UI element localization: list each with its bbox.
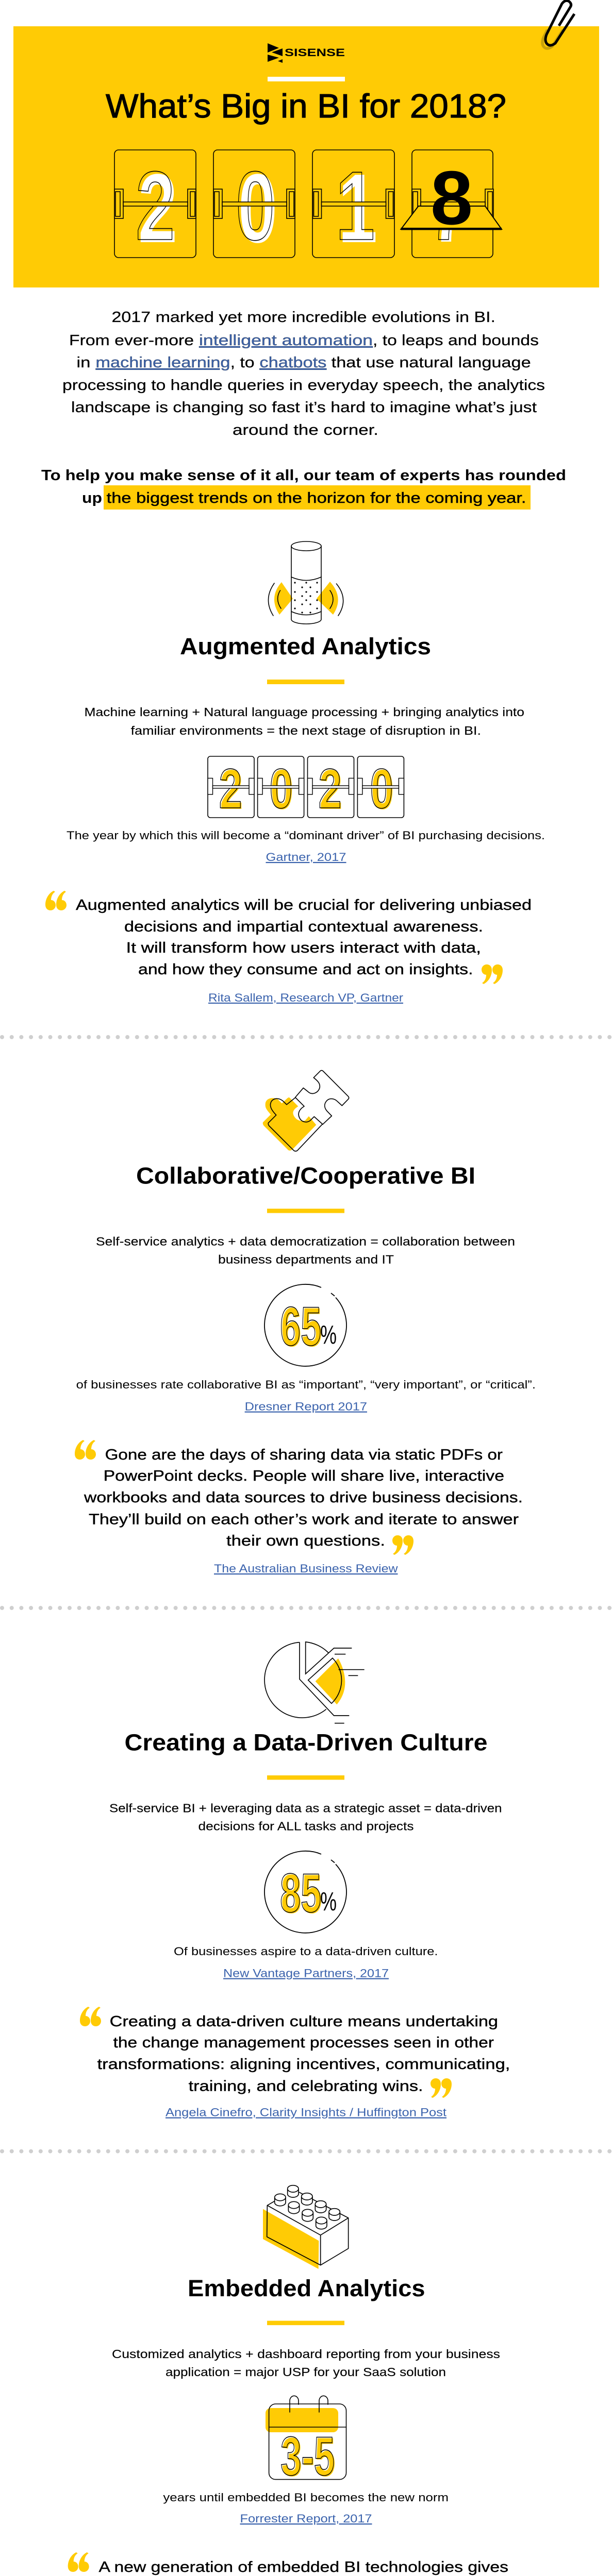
text block: introduction: , to (230, 354, 255, 371)
quote: It will transform how users interact with data, (126, 940, 481, 956)
flip counter 2020: 2 (220, 758, 243, 821)
quote: Augmented analytics will be crucial for delivering unbiased (76, 897, 532, 913)
section: Augmented Analytics (45, 541, 545, 1004)
flip card: 1 (312, 150, 394, 263)
flip counter 2020: 2 (219, 757, 242, 820)
stat: 65%: 65 (281, 1296, 322, 1358)
text: equation (112, 2347, 500, 2379)
text: equation: Self-service BI + leveraging data as a strategic asset = data-driven (109, 1802, 502, 1815)
icon: puzzle pieces (263, 1071, 349, 1151)
quote (45, 891, 532, 984)
flip card: 2: 2 (136, 151, 175, 261)
stat: 65% (264, 1284, 346, 1366)
quote: transformations: aligning incentives, communicating, (97, 2056, 510, 2073)
quote: PowerPoint decks. People will share live, interactive (104, 1468, 504, 1484)
stat: calendar 3-5: 3-5 (280, 2425, 335, 2487)
text: equation (109, 1802, 502, 1833)
quote: and how they consume and act on insights. (138, 961, 473, 978)
stat: 65%: 65 (280, 1295, 321, 1357)
flip counter 2020: 2 (319, 757, 341, 820)
heading: Augmented Analytics (180, 633, 431, 659)
text: equation: decisions for ALL tasks and projects (198, 1820, 413, 1833)
icon: smart speaker (268, 541, 343, 624)
text: equation: familiar environments = the next stage of disruption in BI. (131, 724, 481, 737)
stat: calendar 3-5 (266, 2396, 346, 2488)
text block: introduction: that use natural language (332, 354, 531, 371)
text: stat description: Of businesses aspire to a data-driven culture. (174, 1945, 438, 1958)
callout: highlighted statement: To help you make sense of it all, our team of experts has rounded (41, 467, 566, 484)
text: equation: Customized analytics + dashboard reporting from your business (112, 2347, 500, 2361)
link: source: Forrester Report, 2017 (240, 2512, 372, 2525)
flip card: 2: 2 (138, 154, 177, 263)
link: source: New Vantage Partners, 2017 (223, 1967, 389, 1979)
stat: 85%: % (320, 1887, 337, 1916)
flip counter 2020: 0 (270, 758, 294, 821)
icon: building brick (263, 2185, 349, 2269)
icon: pie chart (264, 1642, 365, 1723)
stat: calendar 3-5: 3-5 (282, 2426, 336, 2488)
text: equation (96, 1235, 515, 1266)
text: equation: business departments and IT (218, 1253, 394, 1266)
flip card: 0: 0 (236, 151, 275, 261)
text block: introduction: machine learning (96, 354, 230, 371)
section: Creating a Data-Driven Culture (80, 1642, 510, 2119)
flip card: 7 flipping to 8 (401, 150, 502, 263)
text block: introduction: chatbots (259, 354, 326, 371)
link: quote source: Rita Sallem, Research VP, Gartner (208, 991, 403, 1004)
text block: introduction: in (76, 354, 90, 371)
text block: introduction: , to leaps and bounds (373, 332, 539, 349)
stat: 85%: 85 (281, 1863, 322, 1925)
quote: their own questions. (226, 1533, 385, 1549)
stat: 65%: % (320, 1320, 337, 1349)
quote: workbooks and data sources to drive business decisions. (84, 1489, 523, 1506)
text: equation: application = major USP for your SaaS solution (166, 2365, 446, 2379)
text: stat description: The year by which this will become a “dominant driver” of BI purchasing decisions. (67, 829, 545, 842)
flip card: 2 (114, 150, 196, 263)
heading: Creating a Data-Driven Culture (125, 1730, 487, 1756)
flip card: 7 flipping to 8: 7 (431, 154, 470, 263)
quote (75, 1440, 523, 1555)
stat: 85%: 85 (280, 1862, 321, 1924)
flip counter 2020: 2 (320, 758, 342, 821)
stat: 85% (264, 1851, 346, 1933)
text block: introduction: processing to handle queries in everyday speech, the analytics (62, 377, 545, 394)
flip counter 2018 (114, 150, 502, 263)
text block: introduction: intelligent automation (199, 332, 373, 349)
title: What’s Big in BI for 2018? (106, 87, 506, 125)
link: quote source: Angela Cinefro, Clarity Insights / Huffington Post (166, 2106, 446, 2119)
text: equation: Machine learning + Natural language processing + bringing analytics into (85, 705, 524, 719)
quote: decisions and impartial contextual awareness. (124, 919, 483, 935)
callout: highlighted statement (41, 467, 566, 510)
callout: highlighted statement: the biggest trends on the horizon for the coming year. (107, 490, 526, 506)
heading: Collaborative/Cooperative BI (136, 1163, 475, 1189)
flip counter 2020 (208, 756, 404, 821)
quote: training, and celebrating wins. (189, 2078, 423, 2095)
quote: Gone are the days of sharing data via static PDFs or (105, 1447, 503, 1463)
flip counter 2020: 0 (370, 757, 393, 820)
quote: They’ll build on each other’s work and iterate to answer (89, 1512, 519, 1528)
text block: introduction: landscape is changing so fast it’s hard to imagine what’s just (71, 399, 537, 416)
text block: introduction: 2017 marked yet more incredible evolutions in BI. (111, 309, 495, 326)
flip card: 1: 1 (336, 151, 375, 261)
icon: paperclip (542, 1, 574, 48)
flip card: 0: 0 (238, 154, 277, 263)
flip counter 2020: 0 (269, 757, 293, 820)
quote (80, 2007, 510, 2098)
quote (68, 2552, 531, 2576)
callout: highlighted statement: up (82, 490, 102, 506)
flip card: 7 flipping to 8: 8 (431, 156, 473, 241)
text block: introduction (62, 309, 545, 438)
text: stat description: years until embedded BI becomes the new norm (163, 2491, 449, 2504)
text: equation: Self-service analytics + data democratization = collaboration between (96, 1235, 515, 1248)
link: quote source: The Australian Business Review (214, 1562, 398, 1575)
heading: Embedded Analytics (188, 2275, 425, 2301)
link: source: Gartner, 2017 (266, 851, 346, 863)
text: stat description: of businesses rate collaborative BI as “important”, “very important”, or “critical”. (76, 1378, 536, 1391)
section: Embedded Analytics (68, 2185, 531, 2576)
panel: yellow hero header (13, 1, 599, 287)
text block: introduction: around the corner. (233, 422, 378, 438)
logo: Sisense: SISENSE (285, 47, 345, 59)
text block: introduction: From ever-more (69, 332, 194, 349)
quote: the change management processes seen in other (113, 2035, 494, 2051)
flip card: 1: 1 (338, 154, 377, 263)
logo: Sisense (268, 43, 345, 63)
flip counter 2020: 0 (371, 758, 394, 821)
flip card: 0 (213, 150, 295, 263)
section: Collaborative/Cooperative BI (75, 1071, 536, 1575)
text: equation (85, 705, 524, 737)
link: source: Dresner Report 2017 (245, 1400, 367, 1413)
quote: A new generation of embedded BI technologies gives (99, 2559, 508, 2575)
flip card: 7 flipping to 8: 7 (428, 151, 468, 261)
quote: Creating a data-driven culture means undertaking (110, 2013, 498, 2030)
